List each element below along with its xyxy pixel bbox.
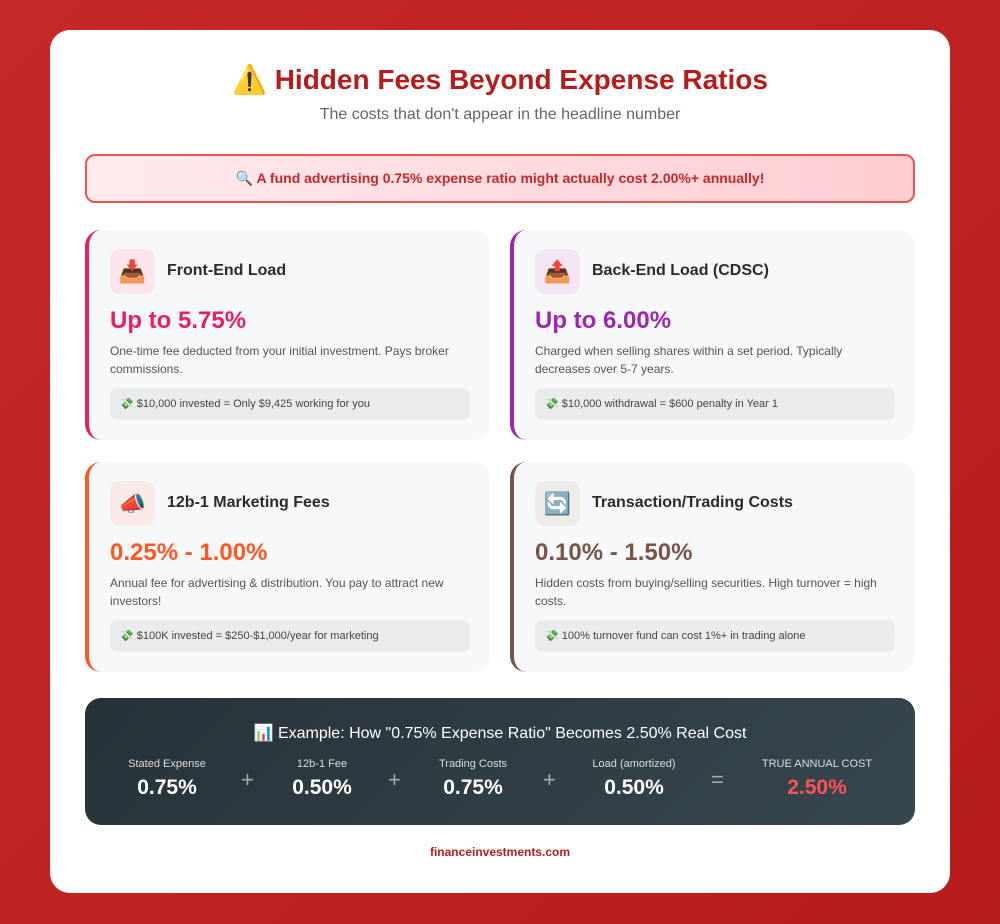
description: One-time fee deducted from your initial investment. Pays broker commissions.: [110, 344, 449, 376]
plus: +: [241, 767, 254, 792]
plus: +: [388, 767, 401, 792]
description: Annual fee for advertising & distribution. You pay to attract new investors!: [110, 576, 444, 608]
icon: cycle: 🔄: [544, 490, 571, 516]
icon: outbox: [535, 249, 580, 294]
heading: 📊 Example: How "0.75% Expense Ratio" Becomes 2.50% Real Cost: [254, 725, 746, 742]
item: 12b-1: 0.50%: [292, 776, 352, 799]
item: true cost: TRUE ANNUAL COST: [762, 758, 872, 770]
example: [110, 620, 470, 652]
alert banner: [85, 154, 915, 203]
item: true cost: [762, 758, 872, 799]
footer: financeinvestments.com: [430, 845, 570, 859]
item: trading: [439, 758, 507, 799]
panel: front-end load: [85, 230, 490, 440]
icon: megaphone: 📣: [119, 490, 146, 516]
example: 💸 $100K invested = $250-$1,000/year for marketing: [120, 630, 379, 642]
panel: back-end load: [510, 230, 915, 440]
example: [110, 388, 470, 420]
icon: inbox: 📥: [119, 258, 146, 284]
example: 💸 $10,000 invested = Only $9,425 working for you: [120, 398, 370, 410]
example: [535, 620, 895, 652]
alert banner: 🔍 A fund advertising 0.75% expense ratio might actually cost 2.00%+ annually!: [236, 170, 764, 186]
icon: inbox: [110, 249, 155, 294]
value: 0.25% - 1.00%: [110, 539, 267, 566]
icon: cycle: [535, 481, 580, 526]
item: 12b-1: [292, 758, 352, 799]
heading: Back-End Load (CDSC): [592, 262, 769, 279]
subtitle: The costs that don't appear in the headline number: [320, 106, 680, 123]
heading: 12b-1 Marketing Fees: [167, 494, 330, 511]
equals: =: [711, 767, 724, 792]
value: 0.10% - 1.50%: [535, 539, 692, 566]
title: ⚠️ Hidden Fees Beyond Expense Ratios: [232, 64, 768, 95]
description: Hidden costs from buying/selling securities. High turnover = high costs.: [535, 576, 877, 608]
item: load: [592, 758, 676, 799]
panel: trading costs: [510, 462, 915, 672]
item: stated: [128, 758, 206, 799]
item: true cost: 2.50%: [787, 776, 847, 799]
value: Up to 5.75%: [110, 307, 246, 334]
item: load: Load (amortized): [592, 758, 676, 770]
description: Charged when selling shares within a set period. Typically decreases over 5-7 years.: [535, 344, 842, 376]
item: stated: 0.75%: [137, 776, 197, 799]
item: load: 0.50%: [604, 776, 664, 799]
item: 12b-1: 12b-1 Fee: [297, 758, 347, 770]
value: Up to 6.00%: [535, 307, 671, 334]
icon: outbox: 📤: [544, 258, 571, 284]
panel: example calculation: [85, 698, 915, 825]
example: 💸 100% turnover fund can cost 1%+ in trading alone: [545, 630, 805, 642]
example: [535, 388, 895, 420]
panel: 12b-1 fees: [85, 462, 490, 672]
item: stated: Stated Expense: [128, 758, 206, 770]
example: 💸 $10,000 withdrawal = $600 penalty in Year 1: [545, 398, 778, 410]
icon: megaphone: [110, 481, 155, 526]
heading: Transaction/Trading Costs: [592, 494, 793, 511]
item: trading: Trading Costs: [439, 758, 507, 770]
item: trading: 0.75%: [443, 776, 503, 799]
plus: +: [543, 767, 556, 792]
heading: Front-End Load: [167, 262, 286, 279]
